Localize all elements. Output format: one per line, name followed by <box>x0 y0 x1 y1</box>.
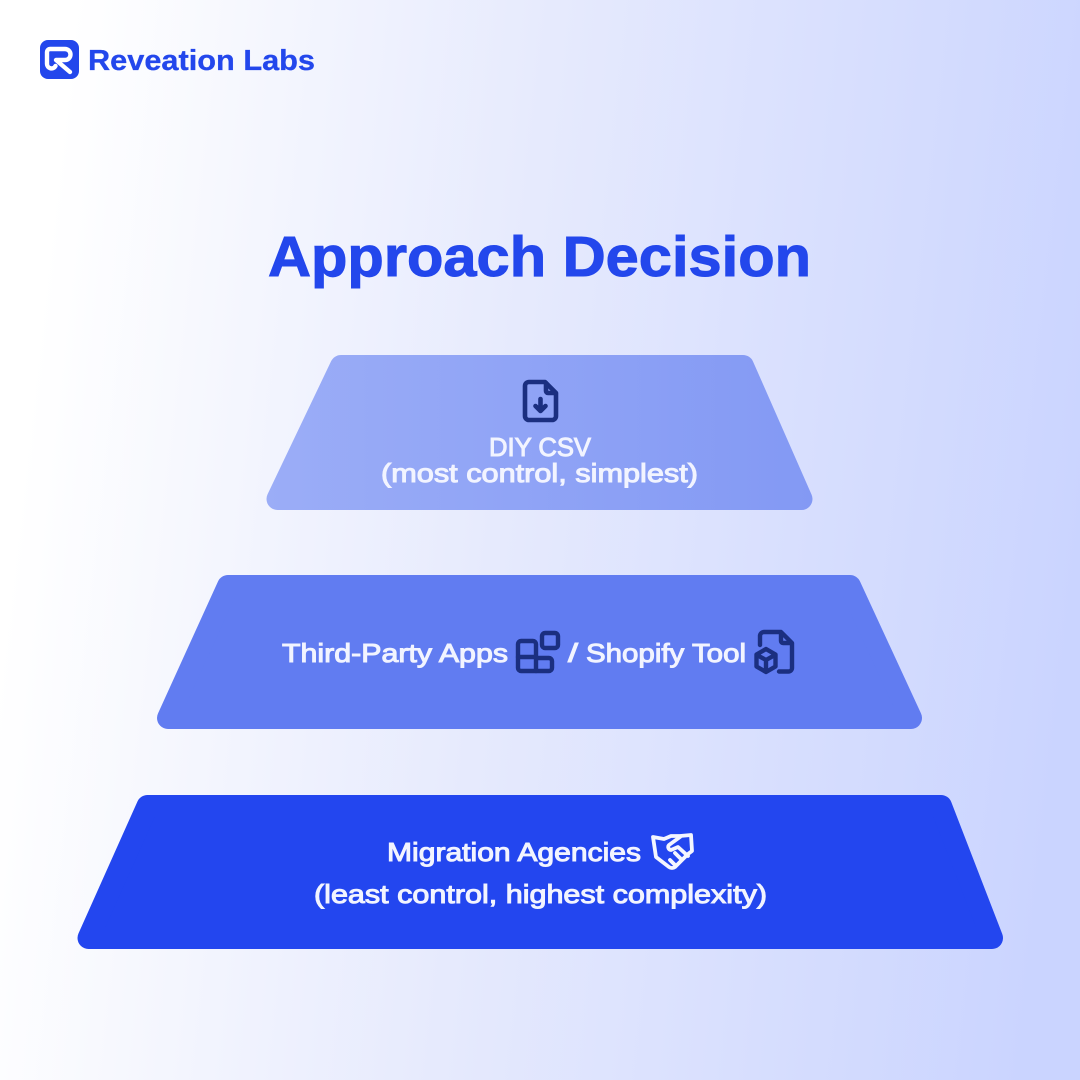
tier label: shopify tool: Shopify Tool <box>586 638 746 668</box>
icon: file with cube <box>756 632 792 672</box>
tier label: DIY CSV: DIY CSV <box>489 432 592 462</box>
panel: migration agencies tier <box>88 806 992 938</box>
icon: handshake <box>653 835 692 868</box>
icon: logo mark <box>40 40 79 79</box>
tier sublabel: least control: (least control, highest complexity) <box>314 879 767 909</box>
tier label: third-party apps: Third-Party Apps <box>282 638 508 668</box>
tier label: migration agencies: Migration Agencies <box>387 837 641 867</box>
panel: DIY CSV tier <box>278 366 802 499</box>
logo wordmark: Reveation Labs <box>88 45 315 77</box>
title: Approach Decision <box>268 225 811 289</box>
logo <box>40 40 315 79</box>
panel: third-party apps tier <box>168 586 911 718</box>
icon: app blocks <box>518 633 558 671</box>
separator slash: / <box>568 638 579 668</box>
icon: file download <box>525 382 556 420</box>
tier sublabel: most control: (most control, simplest) <box>381 458 698 488</box>
